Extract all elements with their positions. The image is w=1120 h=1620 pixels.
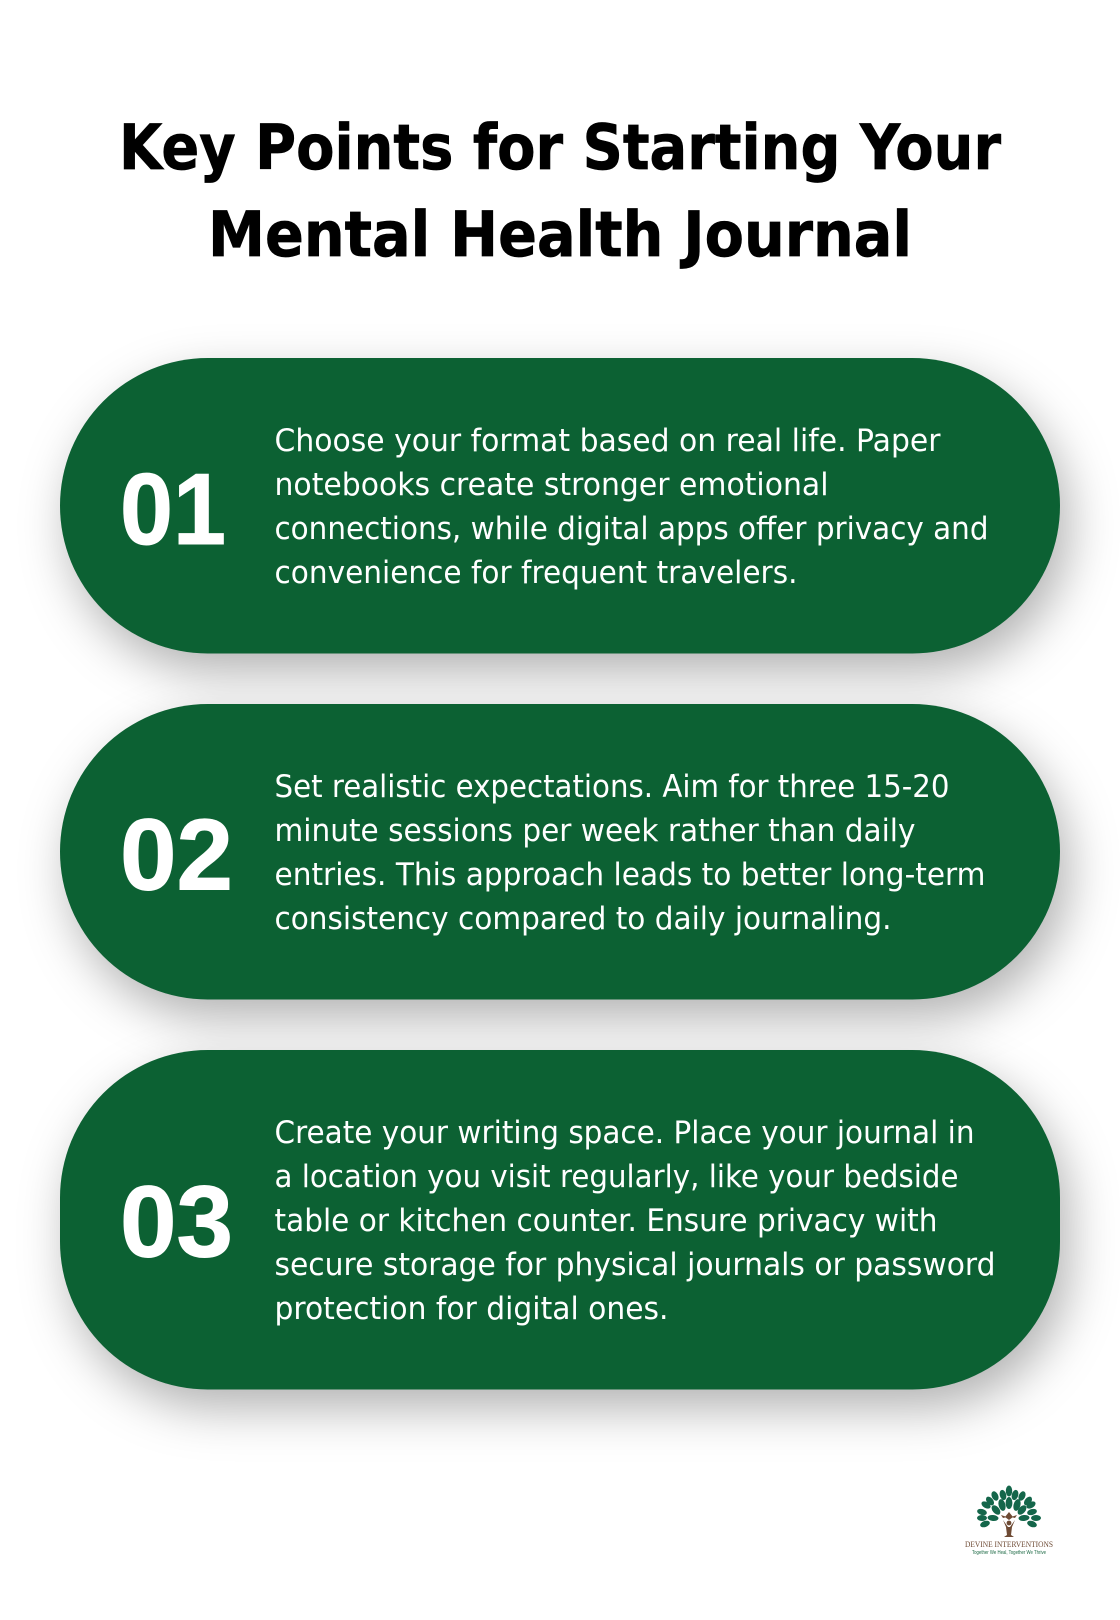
title: Mental Health Journal <box>208 198 912 271</box>
logo name: DEVINE INTERVENTIONS <box>965 1540 1053 1549</box>
text: step 03: a location you visit regularly, like your bedside <box>274 1159 958 1195</box>
panel: step 03 <box>60 1050 1060 1390</box>
text: step 03: Create your writing space. Place your journal in <box>274 1115 974 1151</box>
number 01: 01 <box>120 454 226 566</box>
title: Key Points for Starting Your <box>119 111 1001 184</box>
text: step 01: Choose your format based on real life. Paper <box>274 423 941 459</box>
text: step 02: consistency compared to daily journaling. <box>274 901 892 937</box>
title <box>119 111 1001 271</box>
text: step 01: connections, while digital apps offer privacy and <box>274 511 988 547</box>
number 03: 03 <box>120 1166 233 1278</box>
icon: tree trunk figure <box>1001 1512 1017 1537</box>
icon: tree leaves <box>976 1486 1041 1529</box>
text: step 01: convenience for frequent travelers. <box>274 555 798 591</box>
text: step 02: entries. This approach leads to better long-term <box>274 857 986 893</box>
text: step 02: minute sessions per week rather than daily <box>274 813 916 849</box>
text: step 02 <box>274 769 986 937</box>
number 02: 02 <box>120 800 233 912</box>
text: step 01: notebooks create stronger emotional <box>274 467 828 503</box>
panel: step 01 <box>60 358 1060 654</box>
text: step 03: protection for digital ones. <box>274 1291 668 1327</box>
text: step 03: secure storage for physical journals or password <box>274 1247 996 1283</box>
text: step 02: Set realistic expectations. Aim for three 15-20 <box>274 769 950 805</box>
text: step 01 <box>274 423 988 591</box>
panel: step 02 <box>60 704 1060 1000</box>
logo: Devine Interventions <box>965 1486 1053 1556</box>
logo tagline: Together We Heal, Together We Thrive <box>972 1550 1046 1556</box>
text: step 03 <box>274 1115 996 1327</box>
text: step 03: table or kitchen counter. Ensure privacy with <box>274 1203 938 1239</box>
